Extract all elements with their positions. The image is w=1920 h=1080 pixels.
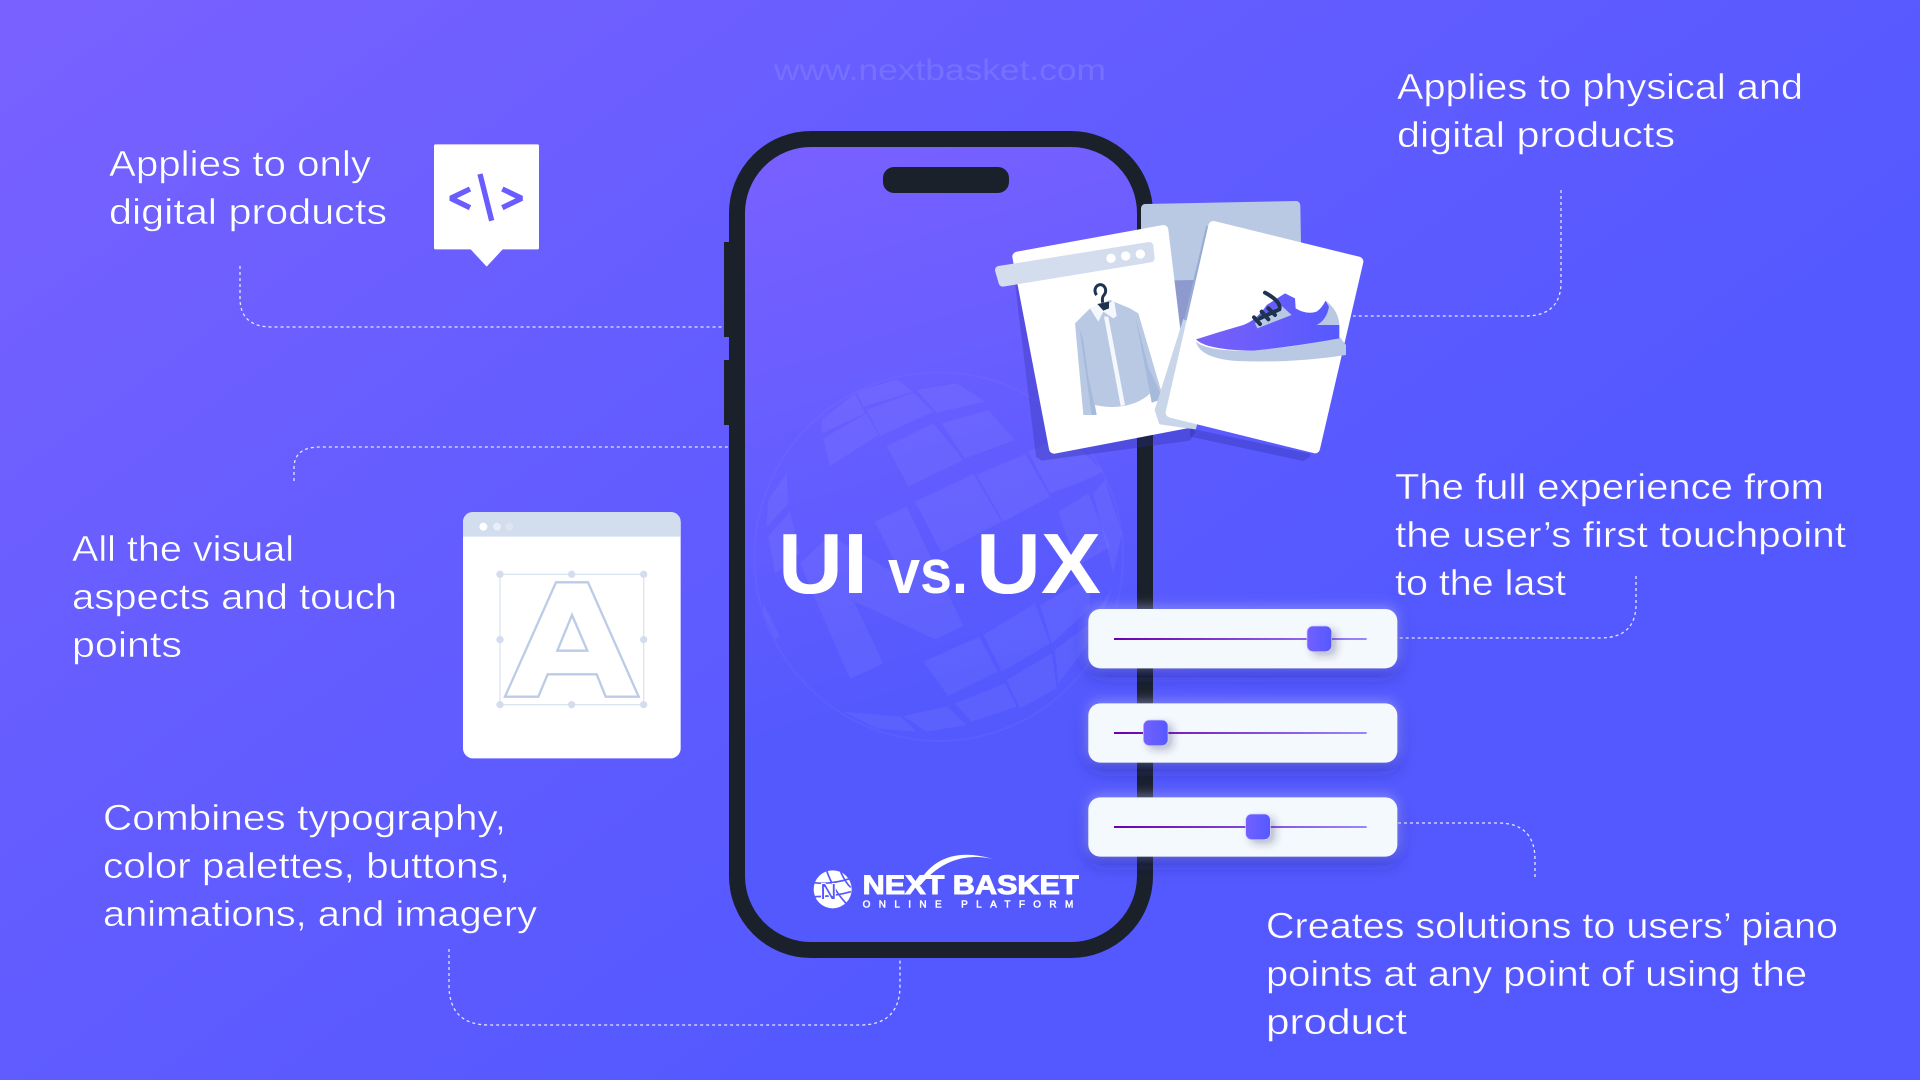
text: combines typography xyxy=(103,797,537,934)
logo globe: N xyxy=(820,878,837,904)
text: applies to only digital products: digital products xyxy=(109,191,387,232)
text: the full experience: the user’s first touchpoint xyxy=(1395,514,1846,555)
product cards illustration xyxy=(999,205,1358,461)
text: creates solutions: product xyxy=(1266,1001,1407,1042)
text: applies to only digital products: Applies to only xyxy=(109,143,371,184)
window body xyxy=(463,512,681,758)
text: all the visual aspects: All the visual xyxy=(72,528,294,569)
shoe card xyxy=(1171,226,1358,448)
icon: code bubble xyxy=(434,144,539,267)
clothing card xyxy=(1017,230,1187,449)
brand logo xyxy=(814,855,1079,911)
shoe card edge shade xyxy=(1184,223,1215,322)
text: applies to physical and digital: digital products xyxy=(1397,114,1675,155)
clothing card shadow xyxy=(1015,280,1195,461)
text: all the visual aspects: aspects and touch xyxy=(72,576,397,617)
letter A with selection box xyxy=(496,571,647,708)
connector: combines typography to phone xyxy=(449,949,900,1025)
text: applies to physical and digital: Applies to physical and xyxy=(1397,66,1803,107)
shirt icon xyxy=(1075,285,1163,415)
title: vs. xyxy=(888,538,968,607)
connector: full experience to slider xyxy=(1398,576,1636,638)
shoe card backing xyxy=(1156,313,1227,428)
shoe card shadow xyxy=(1190,428,1311,461)
text: creates solutions: Creates solutions to users’ piano xyxy=(1266,905,1838,946)
connector: visual aspects to phone xyxy=(294,447,729,481)
globe watermark xyxy=(754,372,1123,741)
phone xyxy=(724,139,1145,950)
connector: physical and digital to cards xyxy=(1353,190,1561,316)
text: the full experience: to the last xyxy=(1395,562,1566,603)
website url: www.nextbasket.com xyxy=(773,54,1106,87)
slider 1 xyxy=(1088,609,1397,668)
phone side buttons xyxy=(724,242,732,425)
text: combines typography: Combines typography, xyxy=(103,797,506,838)
slider 3 xyxy=(1088,797,1397,857)
connector: digital products to phone xyxy=(240,266,724,327)
text: the full experience xyxy=(1395,466,1846,603)
connector: solutions to slider xyxy=(1398,823,1535,878)
window header xyxy=(463,512,681,537)
back card xyxy=(1145,205,1297,347)
title: UI xyxy=(778,517,868,612)
phone body xyxy=(737,139,1145,950)
text: combines typography: color palettes, buttons, xyxy=(103,845,510,886)
text: creates solutions: points at any point of using the xyxy=(1266,953,1807,994)
text: all the visual aspects: points xyxy=(72,624,182,665)
title xyxy=(778,517,1101,612)
ux sliders xyxy=(1088,609,1397,857)
logo globe xyxy=(814,870,852,908)
phone notch xyxy=(883,167,1009,193)
window dots xyxy=(479,523,513,531)
browser bar xyxy=(999,246,1151,283)
title: UX xyxy=(976,517,1101,612)
logo wordmark: NEXT BASKET xyxy=(863,870,1079,900)
text: creates solutions xyxy=(1266,905,1838,1042)
slider 2 xyxy=(1088,703,1397,763)
text: applies to only digital products xyxy=(109,143,387,232)
text: the full experience: The full experience from xyxy=(1395,466,1824,507)
logo tagline: ONLINE PLATFORM xyxy=(863,900,1073,911)
typography window card xyxy=(463,512,681,758)
text: combines typography: animations, and imagery xyxy=(103,893,537,934)
text: all the visual aspects xyxy=(72,528,397,665)
shoe icon xyxy=(1196,293,1346,362)
text: applies to physical and digital xyxy=(1397,66,1803,155)
logo swoosh xyxy=(917,855,993,885)
